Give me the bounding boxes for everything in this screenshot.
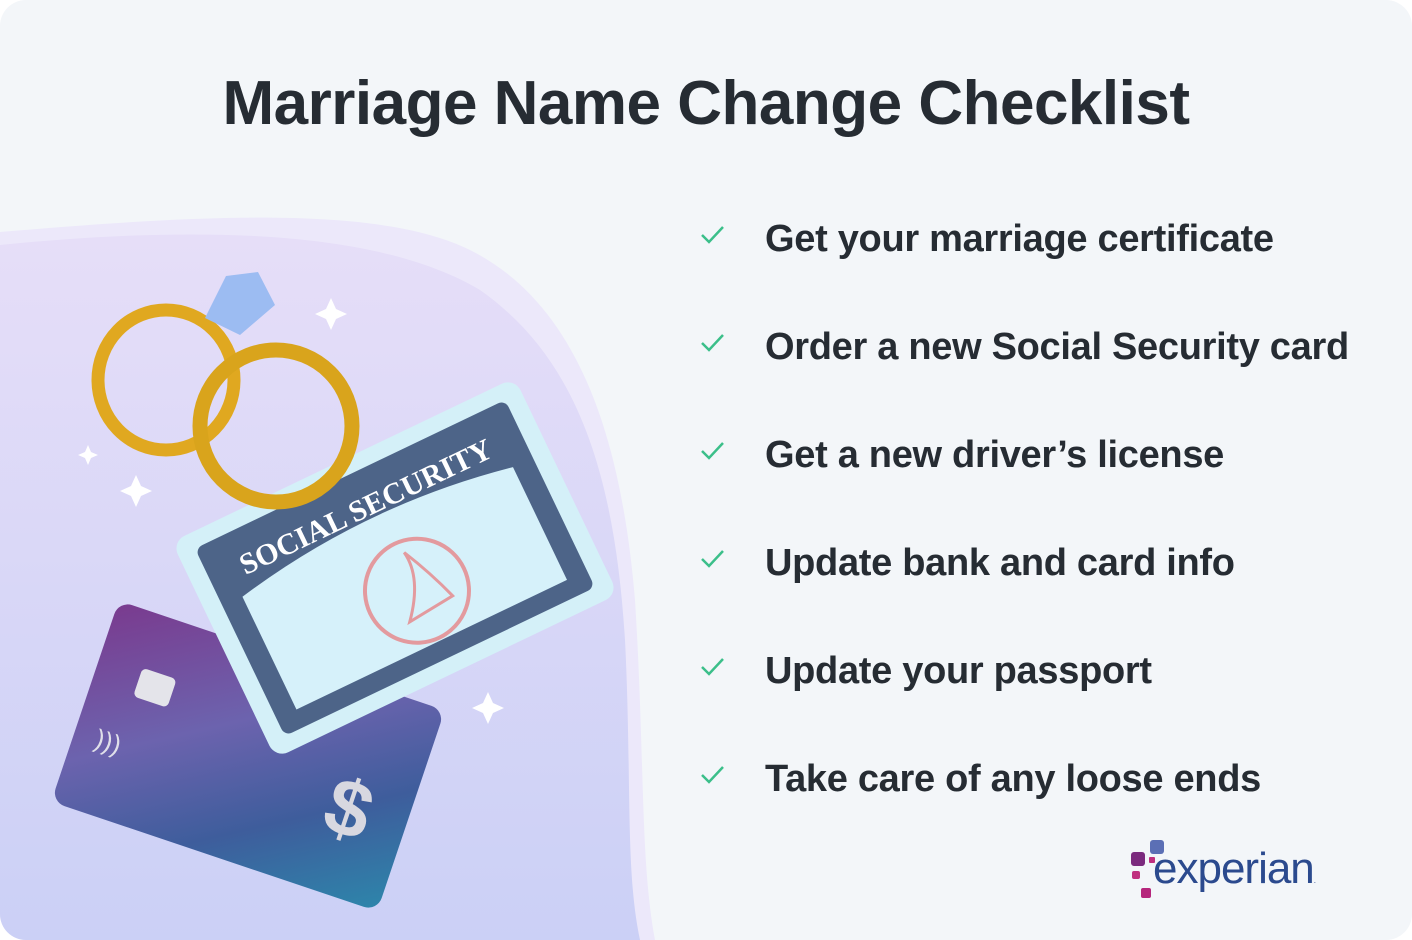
item 2: Order a new Social Security card <box>765 326 1349 368</box>
illustration: rings, social security card, credit card <box>54 272 614 908</box>
item 3: Get a new driver’s license <box>765 434 1224 476</box>
item 4: Update bank and card info <box>765 542 1235 584</box>
credit card: $ <box>314 759 384 858</box>
credit card <box>51 601 445 911</box>
title: Marriage Name Change Checklist <box>222 69 1190 138</box>
credit card: ))) <box>91 723 125 760</box>
social security card <box>172 378 618 758</box>
item 5: Update your passport <box>765 650 1152 692</box>
social security card: SOCIAL SECURITY <box>234 432 498 582</box>
sparkles <box>78 298 504 724</box>
item 6: Take care of any loose ends <box>765 758 1261 800</box>
logo: experian: experian. <box>1153 844 1315 893</box>
checklist <box>701 218 1349 800</box>
rings <box>98 272 352 502</box>
item 1: Get your marriage certificate <box>765 218 1274 260</box>
